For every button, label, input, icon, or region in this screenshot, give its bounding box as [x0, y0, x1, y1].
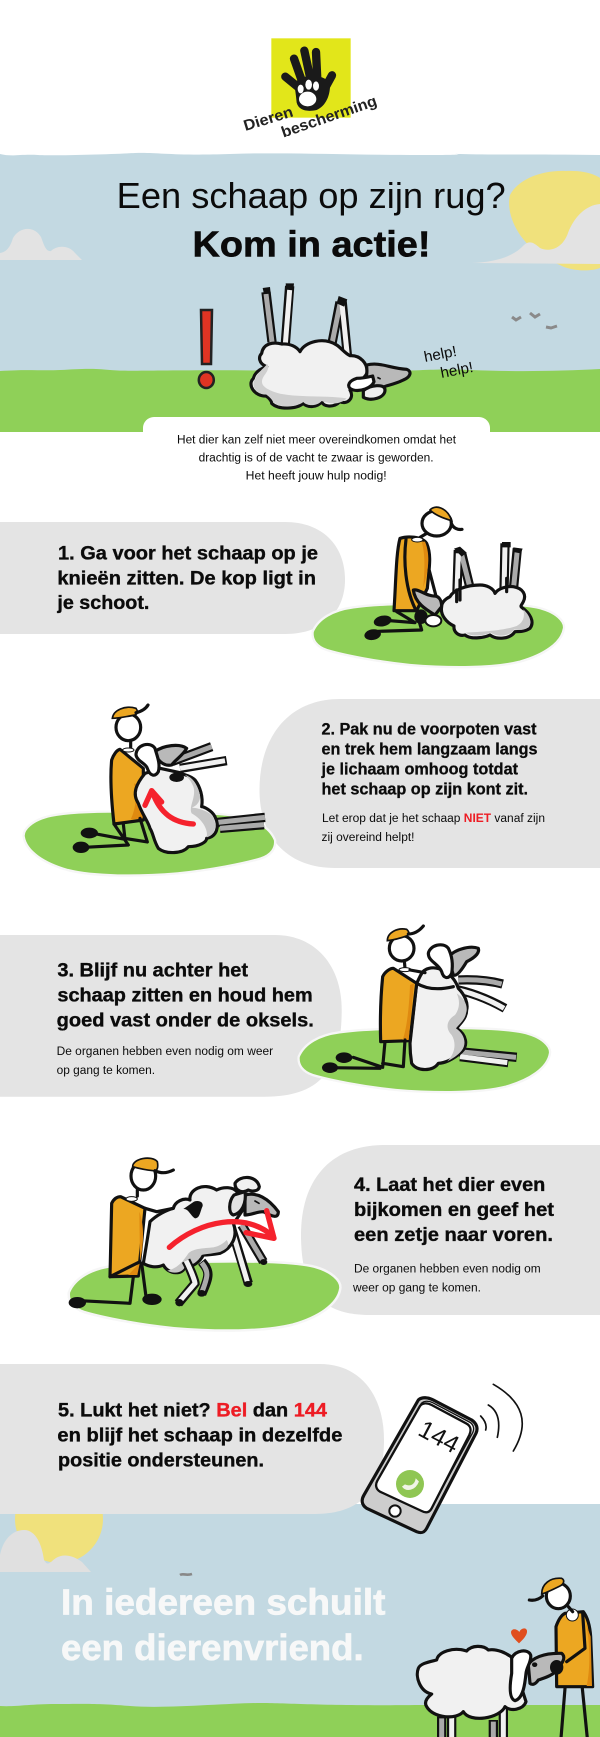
call button — [396, 1470, 424, 1498]
step 3 note: De organen hebben even nodig om weer — [57, 1046, 273, 1058]
illustration: person holding sheep under armpits — [322, 926, 517, 1073]
callout: help help — [423, 343, 475, 382]
phone number: 144 — [414, 1416, 463, 1459]
step 2 text: het schaap op zijn kont zit. — [322, 779, 528, 798]
step 1 text: knieën zitten. De kop ligt in — [57, 568, 316, 589]
step 3 note — [57, 1046, 273, 1077]
panel: step 2 — [24, 699, 600, 876]
callout: help help: help! — [423, 343, 458, 366]
icon: hand with paw — [285, 51, 332, 111]
icon: exclamation mark — [199, 310, 214, 388]
intro text lines: Het heeft jouw hulp nodig! — [246, 470, 387, 482]
grass patch step 1 — [313, 603, 564, 667]
title — [117, 175, 506, 265]
step 2 text: 2. Pak nu de voorpoten vast — [322, 719, 537, 738]
grass footer — [0, 1703, 600, 1737]
step 3 note: op gang te komen. — [57, 1065, 155, 1077]
step 2 note — [322, 813, 545, 844]
slogan: In iedereen schuilt — [61, 1581, 385, 1622]
icon: cloud left — [0, 229, 82, 260]
step 5 text — [57, 1401, 342, 1472]
panel: step 1 — [0, 507, 564, 667]
step 4 text — [354, 1175, 555, 1246]
step 3 text — [57, 961, 314, 1032]
step 4 text: 4. Laat het dier even — [354, 1175, 545, 1196]
illustration: person kneeling with sheep on back — [364, 507, 532, 641]
icon: cloud right — [472, 204, 600, 264]
second help: help! — [439, 359, 475, 382]
logo word: bescherming: bescherming — [279, 93, 379, 141]
illustration: person with happy sheep — [417, 1578, 593, 1737]
step 5 text: 5. Lukt het niet? Bel dan 144 — [58, 1401, 327, 1422]
icon: birds — [512, 313, 557, 328]
step 3 text: 3. Blijf nu achter het — [57, 961, 249, 982]
illustration: person pushing sheep forward — [69, 1158, 278, 1308]
step 1 text — [56, 543, 318, 614]
step 2 text: en trek hem langzaam langs — [322, 739, 538, 758]
panel: step 4 — [69, 1145, 600, 1331]
step 4 note: De organen hebben even nodig om — [354, 1264, 541, 1276]
step 4 note — [352, 1264, 541, 1295]
panel: step 5 — [0, 1364, 384, 1514]
step 4 text: een zetje naar voren. — [354, 1225, 553, 1246]
panel: sky header — [0, 153, 600, 375]
signal waves — [481, 1384, 522, 1451]
exclamation dot — [199, 372, 214, 388]
intro text lines: drachtig is of de vacht te zwaar is geworden. — [199, 452, 434, 464]
icon: cloud footer — [0, 1530, 91, 1572]
step 5 text: en blijf het schaap in dezelfde — [57, 1426, 342, 1447]
step 1 text: je schoot. — [56, 593, 149, 614]
step 1 text: 1. Ga voor het schaap op je — [58, 543, 318, 564]
step 2 note: zij overeind helpt! — [322, 832, 414, 844]
step 2 note: Let erop dat je het schaap NIET vanaf zijn — [322, 813, 545, 825]
logo: Dierenbescherming — [242, 38, 379, 141]
title: Een schaap op zijn rug? — [117, 175, 506, 216]
slogan — [61, 1581, 385, 1668]
title bold line: Kom in actie! — [192, 224, 430, 265]
icon: bird footer — [180, 1574, 192, 1575]
illustration: sheep on its back — [251, 283, 410, 408]
step 3 text: goed vast onder de oksels. — [57, 1011, 314, 1032]
step 2 text — [321, 719, 538, 798]
grass patch step 2 — [24, 812, 275, 876]
icon: phone calling 144 — [362, 1384, 522, 1533]
panel: sky footer — [0, 1475, 600, 1737]
panel: grass header — [0, 369, 600, 432]
step 5 text: positie ondersteunen. — [58, 1451, 264, 1472]
panel: intro text — [0, 417, 490, 487]
panel: step 3 — [0, 926, 550, 1097]
intro text lines — [177, 434, 457, 482]
step 2 text: je lichaam omhoog totdat — [321, 759, 518, 778]
grass patch step 3 — [299, 1028, 550, 1092]
intro text lines: Het dier kan zelf niet meer overeindkomen omdat het — [177, 434, 457, 446]
grass patch step 4 — [69, 1261, 340, 1331]
icon: sun footer — [15, 1475, 103, 1563]
logo word: Dieren: Dieren — [242, 104, 295, 135]
step 4 text: bijkomen en geef het — [354, 1200, 555, 1221]
heart — [511, 1628, 527, 1643]
home button — [389, 1505, 401, 1517]
illustration: person lifting sheep — [73, 705, 265, 853]
icon: sun — [509, 171, 600, 270]
step 4 note: weer op gang te komen. — [352, 1283, 481, 1295]
step 3 text: schaap zitten en houd hem — [57, 986, 313, 1007]
slogan line 2: een dierenvriend. — [61, 1627, 364, 1668]
